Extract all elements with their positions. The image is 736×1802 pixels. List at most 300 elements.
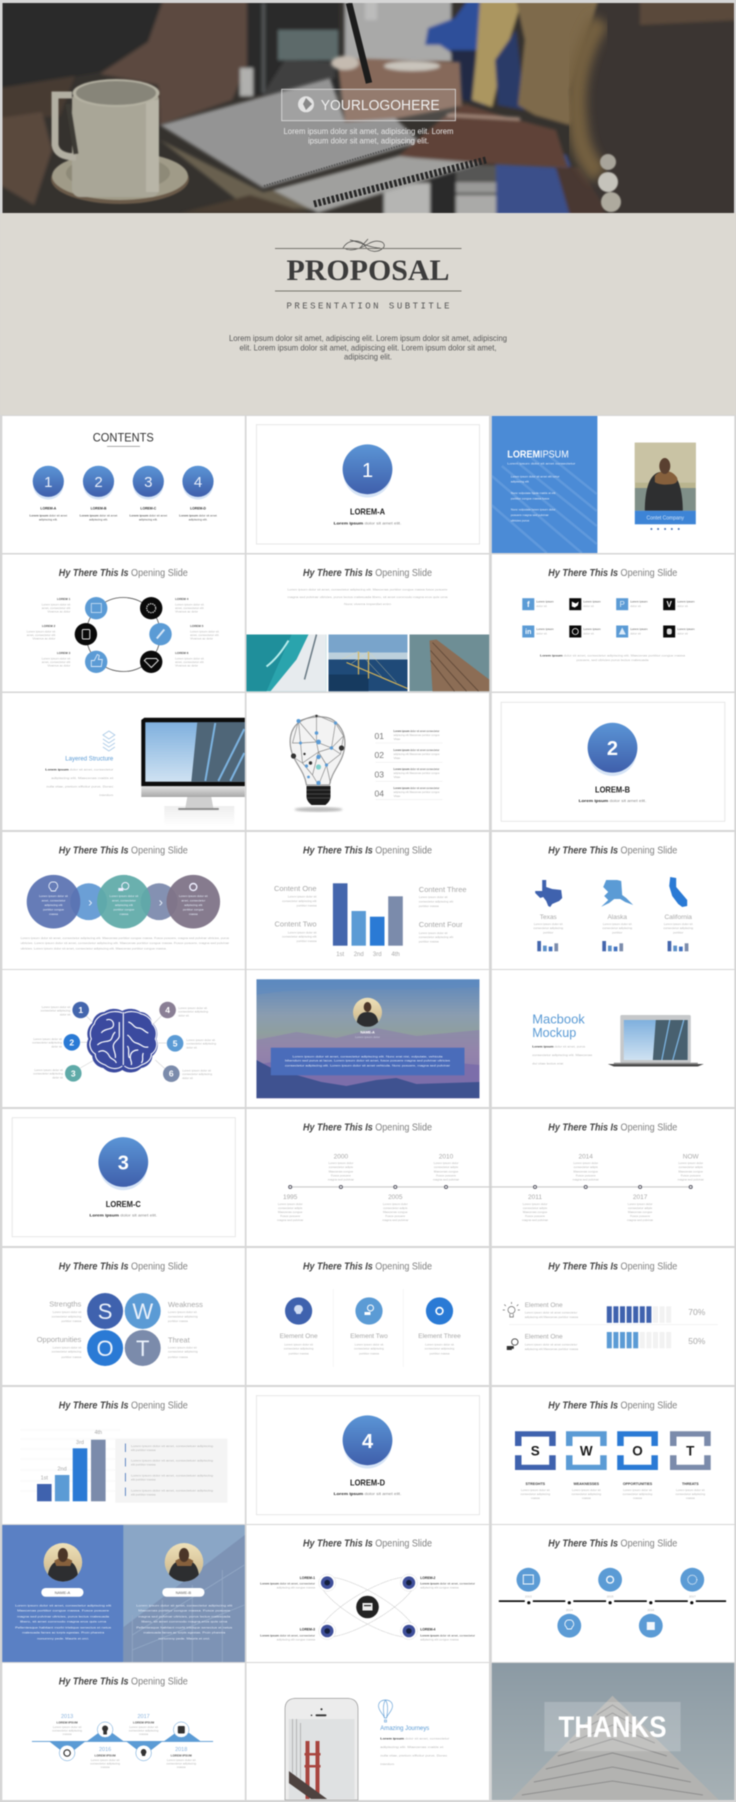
event 1995: Maecenas congue xyxy=(278,1210,303,1214)
slide: thanks xyxy=(492,1663,734,1800)
label: content three: consectetur adipiscing elit xyxy=(419,900,453,904)
photo: hands writing in notebook beside a coffee mug xyxy=(0,0,736,216)
icon: ornamental flourish xyxy=(343,239,384,251)
icon: telescope xyxy=(507,1339,518,1350)
labels left: amet, consectetur elit xyxy=(42,660,70,664)
milestone 2016: 2016 xyxy=(647,1608,654,1612)
label: weakness: consectetur adipiscing xyxy=(168,1314,198,1318)
event 2013 xyxy=(52,1714,82,1736)
map: Alaska: porttitor xyxy=(612,930,622,934)
badge down 2 xyxy=(136,1745,151,1761)
event 2005: Maecenas congue xyxy=(383,1210,408,1214)
event 2000: Maecenas congue xyxy=(329,1169,353,1173)
bio: Maecenas porttitor congue massa. Fusce posuere xyxy=(138,1609,231,1613)
icon row 1: V xyxy=(667,600,673,609)
section sub: Lorem ipsum dolor sit amet elit. xyxy=(334,522,401,526)
photo: tower from below xyxy=(511,1696,719,1800)
label: content two: porttitor massa xyxy=(297,939,317,943)
labels left: amet, consectetur elit xyxy=(42,606,70,610)
bio: libero, sit amet commodo magna eros quis urna xyxy=(141,1620,228,1624)
circle 3 xyxy=(166,875,220,928)
O bracket: massa xyxy=(633,1496,642,1500)
feature text: nulla vitae, pretium efficitur purus. Donec xyxy=(380,1754,448,1758)
notebook spirals xyxy=(314,160,486,204)
O bracket: O xyxy=(632,1444,643,1459)
element two xyxy=(350,1297,388,1355)
event 2000: consectetur adipis xyxy=(329,1165,353,1169)
labels left: amet, consectetur elit xyxy=(27,633,55,637)
circle 3: massa xyxy=(189,912,198,916)
item 2: 2 xyxy=(94,474,103,491)
node 2: dolor sit xyxy=(51,1044,62,1048)
bar chart: 4th xyxy=(94,1430,102,1436)
bar chart xyxy=(37,1430,106,1501)
circle 2: amet, consectetur xyxy=(112,898,136,902)
slide: rising bars with notes xyxy=(2,1387,245,1524)
T bracket: consectetur adipiscing xyxy=(675,1492,705,1496)
icon: layers xyxy=(103,731,115,751)
section heading: LOREM-A xyxy=(350,506,385,516)
label: content four: porttitor massa xyxy=(419,940,439,944)
circle 1 xyxy=(27,875,80,928)
node 5 xyxy=(167,1035,216,1052)
feature text: Lorem ipsum dolor sit amet, consectetur xyxy=(45,768,113,772)
map: California xyxy=(663,877,693,934)
panel list: Nunc vulputate ligula mattis et elit xyxy=(511,491,556,495)
event 2010: Maecenas congue xyxy=(434,1169,459,1173)
slide: section B xyxy=(492,693,734,830)
label: opportunities: consectetur adipiscing xyxy=(52,1350,82,1354)
rule above title xyxy=(275,248,462,249)
node 6: dolor sit xyxy=(182,1076,193,1080)
bio xyxy=(136,1603,233,1640)
slide: light bulb list xyxy=(246,693,489,830)
event 2005: 2005 xyxy=(388,1194,403,1201)
monitor xyxy=(141,718,245,826)
section sub: Lorem ipsum dolor sit amet elit. xyxy=(334,1492,401,1496)
phone screen xyxy=(289,1719,354,1800)
node 3 xyxy=(33,1065,82,1082)
node 2: Lorem ipsum dolor sit xyxy=(33,1037,62,1041)
map: Texas: Texas xyxy=(540,914,557,921)
labels left: LOREM 1 xyxy=(57,597,71,601)
event 2018: Lorem ipsum dolor sit xyxy=(167,1758,196,1762)
footnote: Lorem ipsum dolor sit amet, consectetur adipiscing elit. Maecenas porttitor congue massa xyxy=(540,654,685,658)
mug rim xyxy=(72,79,160,107)
slide: section C xyxy=(2,1109,245,1246)
panel list: Nunc vulputate lorem ipsum dolor xyxy=(511,508,556,512)
node 6 xyxy=(163,1065,212,1082)
progress bar 70 percent xyxy=(607,1306,671,1323)
translucent box xyxy=(544,1702,681,1751)
W bracket: consectetur adipiscing xyxy=(571,1492,601,1496)
node 5: dolor sit xyxy=(186,1045,197,1049)
avatar xyxy=(163,1542,204,1582)
body: Lorem ipsum dolor sit amet, purus xyxy=(532,1044,586,1048)
list item 02: adipiscing elit Maecenas porttitor congue xyxy=(394,752,440,756)
row 2: Element One xyxy=(525,1334,563,1340)
event 2014: consectetur adipis xyxy=(574,1165,598,1169)
section number: 1 xyxy=(362,460,373,482)
slide: SWOT brackets xyxy=(492,1387,734,1524)
event 2005: Fusce posuere xyxy=(385,1214,406,1218)
event 2010 xyxy=(433,1154,459,1182)
event NOW: Lorem ipsum dolor xyxy=(678,1161,703,1165)
list item 02: Vitae xyxy=(394,756,401,760)
element three: Element Three xyxy=(418,1333,461,1340)
list item 04: Vitae xyxy=(394,794,401,798)
circle 1: massa xyxy=(49,912,58,916)
event 2016: 2016 xyxy=(99,1747,111,1753)
row 2: Lorem ipsum dolor sit amet consectetur xyxy=(525,1342,577,1346)
milestone 2015: 2015 xyxy=(607,1594,614,1598)
item 4: Lorem ipsum dolor sit amet xyxy=(179,514,217,518)
node 4: Lorem ipsum dolor sit xyxy=(178,1006,207,1010)
body: consectetur adipiscing elit. Maecenas xyxy=(532,1053,593,1057)
heading: Macbook xyxy=(532,1012,585,1026)
label: threat: Lorem ipsum dolor sit xyxy=(168,1345,197,1349)
center icon xyxy=(356,1596,379,1618)
intro text: elit. Lorem ipsum dolor sit amet, adipiscing elit. Lorem ipsum dolor sit amet, xyxy=(240,342,496,352)
node 5: Lorem ipsum dolor sit xyxy=(186,1038,215,1042)
event 1995: magna sed pulvinar xyxy=(277,1218,303,1222)
heading: Hy There This Is Opening Slide xyxy=(548,1539,678,1550)
event 2013: 2013 xyxy=(61,1714,73,1720)
list item 02 xyxy=(374,748,442,763)
O bracket: Lorem ipsum dolor sit xyxy=(623,1488,652,1492)
map: California: California xyxy=(664,914,692,921)
connector circles xyxy=(70,883,178,920)
bio: Lorem ipsum dolor sit amet, consectetur adipiscing elit xyxy=(15,1603,111,1607)
photo: beach xyxy=(246,634,326,691)
section number: 4 xyxy=(362,1431,374,1453)
slide: social icons xyxy=(492,554,734,692)
slide: macbook mockup xyxy=(492,970,734,1107)
bar chart xyxy=(333,883,403,958)
icon row 1 xyxy=(522,598,695,610)
list item 01: Vitae xyxy=(394,737,401,741)
event 2013: massa xyxy=(63,1732,72,1736)
node 4: LOREM-4 xyxy=(420,1628,436,1632)
event NOW: consectetur adipis xyxy=(679,1165,703,1169)
slide: timeline part 2 xyxy=(492,1109,734,1246)
node 3 xyxy=(260,1622,336,1641)
list item 02: 02 xyxy=(374,750,384,760)
event 2014: Lorem ipsum dolor xyxy=(573,1161,598,1165)
progress bar 50 percent xyxy=(607,1332,671,1348)
event NOW xyxy=(678,1154,704,1182)
mini bars: California xyxy=(668,941,688,951)
notes panel: elit porttitor massa xyxy=(131,1448,156,1452)
thanks text: THANKS xyxy=(558,1711,666,1744)
photo caption bar xyxy=(635,511,696,524)
event 2011: Fusce posuere xyxy=(525,1214,545,1218)
S circle xyxy=(87,1293,123,1329)
T bracket: T xyxy=(686,1444,695,1459)
section number xyxy=(588,723,637,776)
caption xyxy=(21,936,230,950)
map: Texas xyxy=(533,880,563,934)
event 2017: Lorem ipsum dolor sit xyxy=(129,1725,158,1729)
item 1 xyxy=(29,466,67,522)
node 3: adipiscing elit congue massa xyxy=(277,1637,315,1641)
heading: Hy There This Is Opening Slide xyxy=(303,1262,432,1273)
heading: Hy There This Is Opening Slide xyxy=(59,568,188,579)
map: Texas: Lorem ipsum dolor sit xyxy=(534,922,563,926)
W bracket: WEAKNESSES xyxy=(574,1482,600,1486)
node 1 xyxy=(85,597,107,619)
node 2: LOREM-2 xyxy=(420,1576,436,1580)
event 2000: Fusce posuere xyxy=(331,1174,351,1178)
event 2018: massa xyxy=(177,1765,186,1769)
heading: Hy There This Is Opening Slide xyxy=(548,568,678,579)
intro text: adipiscing elit. xyxy=(344,352,392,362)
feature text: interdum xyxy=(99,793,114,797)
event 2000: magna sed pulvinar xyxy=(328,1178,354,1182)
element one xyxy=(280,1297,318,1355)
item 2: LOREM-B xyxy=(91,506,107,510)
labels right: Vivamus ac dolor xyxy=(175,610,198,614)
icon: logo mark xyxy=(298,96,314,112)
labels right: LOREM 5 xyxy=(190,624,204,628)
node 2 xyxy=(32,1034,80,1051)
element two: Element Two xyxy=(350,1333,388,1340)
event 2017: LOREM IPSUM xyxy=(133,1720,155,1724)
event 2017: Maecenas congue xyxy=(628,1210,653,1214)
item 2: adipiscing elit. xyxy=(89,518,108,522)
label: strengths: porttitor massa xyxy=(61,1319,82,1323)
body text: magna sed pulvinar ultricies, purus lectus malesuada libero, sit amet commodo magna eros quis urna xyxy=(288,595,448,599)
O circle xyxy=(87,1330,123,1366)
label: content four: Content Four xyxy=(419,920,463,929)
circle 1: Lorem ipsum dolor sit xyxy=(39,894,68,898)
caption: Lorem ipsum dolor sit amet, consectetur adipiscing elit. Maecenas porttitor congue massa. Fusce posuere, magna sed pulvinar ultricies, purus xyxy=(21,936,230,940)
list item 04 xyxy=(374,786,442,800)
quote panel: Lorem ipsum dolor sit amet, consectetur adipiscing elit. Nunc erat nisi, vulputate, vehicula xyxy=(292,1054,443,1058)
milestone 2016 xyxy=(639,1608,663,1638)
node 2: consectetur adipiscing xyxy=(32,1041,62,1045)
list item 01 xyxy=(374,729,442,743)
right panel building xyxy=(124,1536,245,1662)
monitor screen xyxy=(145,722,245,782)
photo: bridge xyxy=(328,634,408,691)
row 1: 70% xyxy=(688,1307,706,1317)
icon row 1: dolor sit xyxy=(536,604,547,608)
element one: Lorem ipsum dolor sit xyxy=(284,1342,313,1346)
bio: magna sed pulvinar ultricies, purus lectus malesuada xyxy=(17,1614,110,1618)
node 1: Lorem ipsum dolor sit xyxy=(42,1005,70,1009)
rule below title xyxy=(275,290,462,292)
event 2017: Fusce posuere xyxy=(630,1214,650,1218)
list item 03: Vitae xyxy=(394,775,401,779)
map: Alaska xyxy=(601,880,633,934)
element one: Element One xyxy=(280,1333,318,1340)
banner caption xyxy=(284,127,454,146)
label: weakness: Lorem ipsum dolor sit xyxy=(168,1310,197,1314)
list item 04: Lorem ipsum dolor sit amet consectetur xyxy=(394,786,440,790)
body text: Nunc viverra imperdiet enim xyxy=(344,602,392,606)
heading: Hy There This Is Opening Slide xyxy=(548,1262,678,1273)
label: content three xyxy=(419,885,467,908)
label: content two: Content Two xyxy=(275,920,316,928)
node 1: adipiscing elit congue massa xyxy=(277,1586,315,1590)
left panel xyxy=(2,1525,123,1662)
item 4 xyxy=(179,466,217,522)
item 3: adipiscing elit. xyxy=(139,518,158,522)
event 2011: Maecenas congue xyxy=(523,1210,548,1214)
circle 2: porttitor congue xyxy=(113,908,135,912)
icon row 1: f xyxy=(527,600,530,609)
label: content three: Content Three xyxy=(419,885,467,894)
element one: consectetur adipiscing xyxy=(284,1347,314,1351)
slide: timeline part 1 xyxy=(246,1109,489,1246)
panel list: adipiscing elit xyxy=(511,480,529,484)
circle 1: amet, consectetur xyxy=(42,898,65,902)
caption: ultricies. Lorem ipsum dolor sit amet, consectetur adipiscing elit. Maecenas porttitor congue massa. Fusce posuere, magna sed pulvinar xyxy=(21,941,229,945)
labels left: Lorem ipsum dolor sit xyxy=(42,656,70,660)
element three: consectetur adipiscing xyxy=(425,1347,455,1351)
event 2005: Lorem ipsum dolor xyxy=(383,1202,408,1206)
event 1995: 1995 xyxy=(283,1194,298,1201)
event 1995: Lorem ipsum dolor xyxy=(278,1202,303,1206)
icon row 2: Lorem ipsum xyxy=(630,627,648,631)
S bracket: STREGHTS xyxy=(526,1482,546,1486)
label: threat xyxy=(168,1336,198,1359)
feature text: Lorem ipsum dolor sit amet, consectetur xyxy=(380,1737,449,1741)
heading xyxy=(532,1012,585,1040)
node 1: Lorem ipsum dolor sit amet, consectetur xyxy=(260,1582,315,1586)
event 2017: 2017 xyxy=(137,1714,150,1720)
icon row 2: in xyxy=(525,629,531,636)
item 3: 3 xyxy=(144,474,152,491)
O circle: O xyxy=(97,1336,114,1361)
W bracket xyxy=(566,1431,607,1500)
slide: desktop mockup xyxy=(2,693,245,830)
event 2018: consectetur adipiscing xyxy=(166,1761,196,1765)
event NOW: magna sed pulvinar xyxy=(678,1178,704,1182)
W circle: W xyxy=(132,1299,153,1324)
event 2013: Lorem ipsum dolor sit xyxy=(53,1725,82,1729)
bar chart: 1st xyxy=(41,1476,48,1482)
list item 03: Lorem ipsum dolor sit amet consectetur xyxy=(394,767,440,771)
label: opportunities: Lorem ipsum dolor sit xyxy=(53,1345,81,1349)
slide: icon timeline xyxy=(492,1525,734,1662)
slide: six icon ring xyxy=(2,554,245,692)
S circle: S xyxy=(98,1299,112,1324)
circle 3: amet, consectetur xyxy=(181,898,205,902)
phone xyxy=(285,1698,358,1800)
mini bars: Texas xyxy=(537,941,558,951)
photo caption bar: Contet Company xyxy=(647,515,685,521)
T bracket: THREATS xyxy=(682,1482,699,1486)
heading: Hy There This Is Opening Slide xyxy=(59,1677,188,1688)
node 1 xyxy=(41,1002,89,1018)
event 2016 xyxy=(90,1747,120,1769)
event 2000: 2000 xyxy=(334,1154,349,1160)
list item 01: 01 xyxy=(374,731,384,741)
node 4: 4 xyxy=(165,1005,170,1015)
panel list: Lorem ipsum dolor sit amet elit tortor xyxy=(511,474,559,478)
item 1: 1 xyxy=(44,474,52,491)
S bracket: consectetur adipiscing xyxy=(520,1492,550,1496)
event 2010: Lorem ipsum dolor xyxy=(434,1161,458,1165)
feature text xyxy=(380,1737,449,1766)
label: threat: Threat xyxy=(168,1336,191,1344)
circle 2 xyxy=(97,875,151,928)
labels right: amet, consectetur elit xyxy=(190,633,219,637)
event 2017: 2017 xyxy=(633,1194,648,1201)
banner caption: ipsum dolor sit amet, adipiscing elit. xyxy=(308,136,429,146)
event 2014: Fusce posuere xyxy=(576,1174,596,1178)
icon row 2: Lorem ipsum xyxy=(536,627,554,631)
slide: section D xyxy=(246,1387,489,1524)
heading: Hy There This Is Opening Slide xyxy=(303,1123,432,1134)
icon row 1: Lorem ipsum xyxy=(583,600,601,604)
feature text: adipiscing elit. Maecenas mattis et xyxy=(380,1745,444,1749)
node 5 xyxy=(149,623,172,645)
labels left: Vivamus ac dolor xyxy=(47,664,70,668)
subtitle: PRESENTATION SUBTITLE xyxy=(286,302,450,312)
node 4: consectetur adipiscing xyxy=(178,1010,208,1014)
connector circles: › xyxy=(159,894,163,910)
avatar xyxy=(42,1542,83,1582)
labels right: LOREM 4 xyxy=(175,597,189,601)
bar chart: 1st xyxy=(336,952,345,958)
bio: nonummy pede. Mauris et orci. xyxy=(37,1636,89,1640)
section number xyxy=(343,444,392,498)
node 4 xyxy=(159,1002,208,1018)
event 2016: LOREM IPSUM xyxy=(95,1754,116,1758)
node 4 xyxy=(140,597,162,619)
labels right: LOREM 6 xyxy=(175,651,189,655)
label: content four xyxy=(419,920,463,944)
bio: magna sed pulvinar ultricies, purus lectus malesuada xyxy=(138,1614,231,1618)
logo text: YOURLOGOHERE xyxy=(321,97,440,114)
timeline axis spanning two slides xyxy=(289,1186,692,1188)
circle 2: Lorem ipsum dolor sit xyxy=(110,894,138,898)
section number xyxy=(343,1415,392,1468)
event 2018: LOREM IPSUM xyxy=(171,1754,192,1758)
icon row 1: P xyxy=(620,600,625,609)
name pill: NAME-A xyxy=(55,1590,71,1595)
bio: Maecenas porttitor congue massa. Fusce posuere xyxy=(17,1609,110,1613)
item 4: adipiscing elit. xyxy=(189,518,208,522)
bar chart: 2nd xyxy=(58,1466,67,1472)
event 2017: magna sed pulvinar xyxy=(627,1218,653,1222)
slide: contents xyxy=(2,416,245,553)
wave baseline xyxy=(32,1733,213,1750)
node 2: Lorem ipsum dolor sit amet, consectetur xyxy=(420,1582,475,1586)
banner caption: Lorem ipsum dolor sit amet, adipiscing elit. Lorem xyxy=(284,127,454,136)
node 4: adipiscing elit congue massa xyxy=(420,1637,459,1641)
node 6: consectetur adipiscing xyxy=(182,1072,212,1076)
slide: SWOT circles xyxy=(2,1248,245,1385)
icon row 1: Lorem ipsum xyxy=(677,600,695,604)
feature heading: Layered Structure xyxy=(65,756,114,763)
circle 3: porttitor congue xyxy=(183,908,204,912)
label: opportunities: Opportunities xyxy=(37,1335,82,1344)
label: content four: consectetur adipiscing elit xyxy=(419,935,453,939)
label: content one: Content One xyxy=(274,884,316,893)
ring xyxy=(86,598,160,672)
bio xyxy=(15,1603,112,1640)
node 1: dolor sit xyxy=(60,1012,70,1016)
labels right: Lorem ipsum dolor sit xyxy=(175,602,204,606)
section heading: LOREM-D xyxy=(350,1477,385,1487)
label: threat: porttitor massa xyxy=(168,1355,188,1359)
event 2016: massa xyxy=(101,1765,110,1769)
icon row 2: Lorem ipsum xyxy=(583,627,601,631)
